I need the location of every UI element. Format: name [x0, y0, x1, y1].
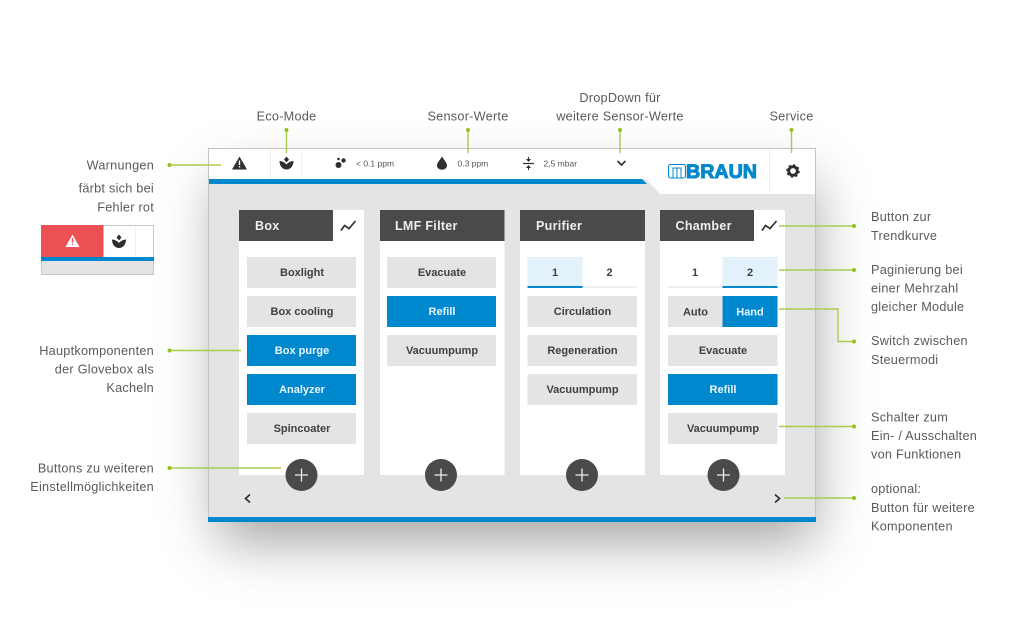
button: Spincoater: Spincoater [274, 423, 331, 435]
callout: Paginierung [779, 263, 964, 314]
callout: Sensor-Werte: Sensor-Werte [427, 110, 509, 124]
icon: dropdown chevron [618, 161, 626, 165]
callout: optional button: optional: [871, 482, 921, 496]
icon: trend [762, 221, 776, 230]
add button [708, 459, 740, 491]
callout: Steuermodi: Steuermodi [871, 353, 938, 367]
heading: Chamber: Chamber [676, 219, 732, 233]
button: Vacuumpump: Vacuumpump [687, 423, 759, 435]
button: Refill [387, 296, 496, 327]
callout: Schalter: Schalter zum [871, 410, 948, 424]
button: Box purge: Box purge [275, 345, 329, 357]
icon: eco mode [280, 156, 294, 170]
pagination [528, 257, 637, 288]
button: Evacuate: Evacuate [418, 267, 466, 279]
button: Circulation [528, 296, 637, 327]
callout: Eco-Mode: Eco-Mode [257, 110, 316, 124]
bottom bar [208, 517, 816, 522]
callout: Hauptkomponenten: Kacheln [106, 381, 154, 395]
button: Regeneration [528, 335, 637, 366]
button: Analyzer [247, 374, 356, 405]
callout: Schalter: von Funktionen [871, 448, 961, 462]
button: Refill: Refill [429, 306, 455, 318]
callout: Hauptkomponenten: der Glovebox als [55, 362, 154, 376]
pagination: 2 [747, 267, 753, 279]
callout: Steuermodi: Switch zwischen [871, 334, 968, 348]
button: Spincoater [247, 413, 356, 444]
button: Refill [668, 374, 778, 405]
heading: LMF Filter [380, 210, 504, 241]
button: Evacuate [387, 257, 496, 288]
pagination: 1 [552, 267, 558, 279]
callout: Trendkurve [779, 210, 937, 243]
callout: Steuermodi [779, 309, 968, 367]
button: Vacuumpump [528, 374, 637, 405]
switch: Auto / Hand [668, 296, 778, 327]
callout: Schalter: Ein- / Ausschalten [871, 429, 977, 443]
button: Regeneration: Regeneration [547, 345, 618, 357]
button: Boxlight [247, 257, 356, 288]
icon: service gear [787, 165, 799, 177]
icon: drop [437, 156, 447, 170]
add button [566, 459, 598, 491]
frame shadow [214, 160, 810, 522]
panel: LMF Filter [380, 210, 504, 491]
switch: Auto / Hand: Hand [736, 306, 764, 318]
button: Box cooling [247, 296, 356, 327]
button: Circulation: Circulation [554, 306, 612, 318]
button: Vacuumpump [668, 413, 778, 444]
sensor value: drop: 0.3 ppm [458, 158, 488, 168]
callout: Trendkurve: Trendkurve [871, 229, 937, 243]
pagination [668, 257, 778, 288]
callout: Eco-Mode [257, 110, 316, 153]
panel: Box [239, 210, 364, 491]
add button [286, 459, 318, 491]
note: error colour: färbt sich bei [79, 182, 154, 196]
pagination: 1 [692, 267, 698, 279]
switch: Auto / Hand: Auto [683, 306, 708, 318]
logo: BRAUN [686, 161, 757, 183]
callout: Buttons: Buttons zu weiteren [38, 462, 154, 476]
button: Evacuate: Evacuate [699, 345, 747, 357]
callout: DropDown [555, 91, 684, 153]
add button [425, 459, 457, 491]
heading: LMF Filter: LMF Filter [395, 219, 458, 233]
button: Analyzer: Analyzer [279, 384, 326, 396]
sensor value: pressure: 2,5 mbar [544, 158, 577, 168]
icon: eco mode [112, 234, 126, 248]
button: Vacuumpump [387, 335, 496, 366]
callout: Buttons [30, 462, 281, 494]
callout: Schalter [779, 410, 977, 462]
callout: Warnungen: Warnungen [87, 158, 154, 172]
icon: warning white [66, 234, 80, 247]
button: Boxlight: Boxlight [280, 267, 324, 279]
callout: Sensor-Werte [427, 110, 509, 153]
icon: warning [232, 156, 247, 170]
icon: particles [336, 158, 346, 168]
top bar [209, 149, 815, 194]
callout: DropDown: weitere Sensor-Werte [555, 110, 684, 124]
heading: Box: Box [255, 219, 280, 233]
callout: Paginierung: gleicher Module [871, 300, 964, 314]
sensor value: particles: < 0.1 ppm [356, 158, 394, 168]
UI frame [208, 148, 816, 522]
heading: Purifier: Purifier [536, 219, 582, 233]
heading: Purifier [520, 210, 645, 241]
button: Box cooling: Box cooling [271, 306, 333, 318]
button: Refill: Refill [710, 384, 736, 396]
button: Vacuumpump: Vacuumpump [546, 384, 619, 396]
icon: trend [341, 221, 356, 230]
callout: optional button [784, 482, 975, 534]
callout: optional button: Komponenten [871, 520, 953, 534]
note: error colour second line: Fehler rot [97, 200, 154, 214]
callout: DropDown: DropDown für [579, 91, 661, 105]
button: Box purge [247, 335, 356, 366]
panel: Purifier [520, 210, 645, 491]
callout: Service: Service [769, 110, 814, 124]
callout: Trendkurve: Button zur [871, 210, 932, 224]
pagination: 2 [606, 267, 613, 279]
callout: Buttons: Einstellmöglichkeiten [30, 480, 154, 494]
callout: Paginierung: einer Mehrzahl [871, 282, 958, 296]
button: Evacuate [668, 335, 778, 366]
callout: Paginierung: Paginierung bei [871, 263, 963, 277]
icon: pressure [523, 157, 534, 170]
callout: Hauptkomponenten [39, 344, 241, 395]
arrow: previous [246, 494, 250, 502]
callout: Warnungen [87, 158, 221, 172]
panel: Chamber [660, 210, 785, 491]
callout: Service [769, 110, 814, 153]
heading: Chamber [660, 210, 754, 241]
heading: Box [239, 210, 333, 241]
arrow: next [775, 494, 780, 502]
error state thumbnail [41, 225, 154, 274]
callout: Hauptkomponenten: Hauptkomponenten [39, 344, 154, 358]
callout: optional button: Button für weitere [871, 501, 975, 515]
button: Vacuumpump: Vacuumpump [406, 345, 478, 357]
